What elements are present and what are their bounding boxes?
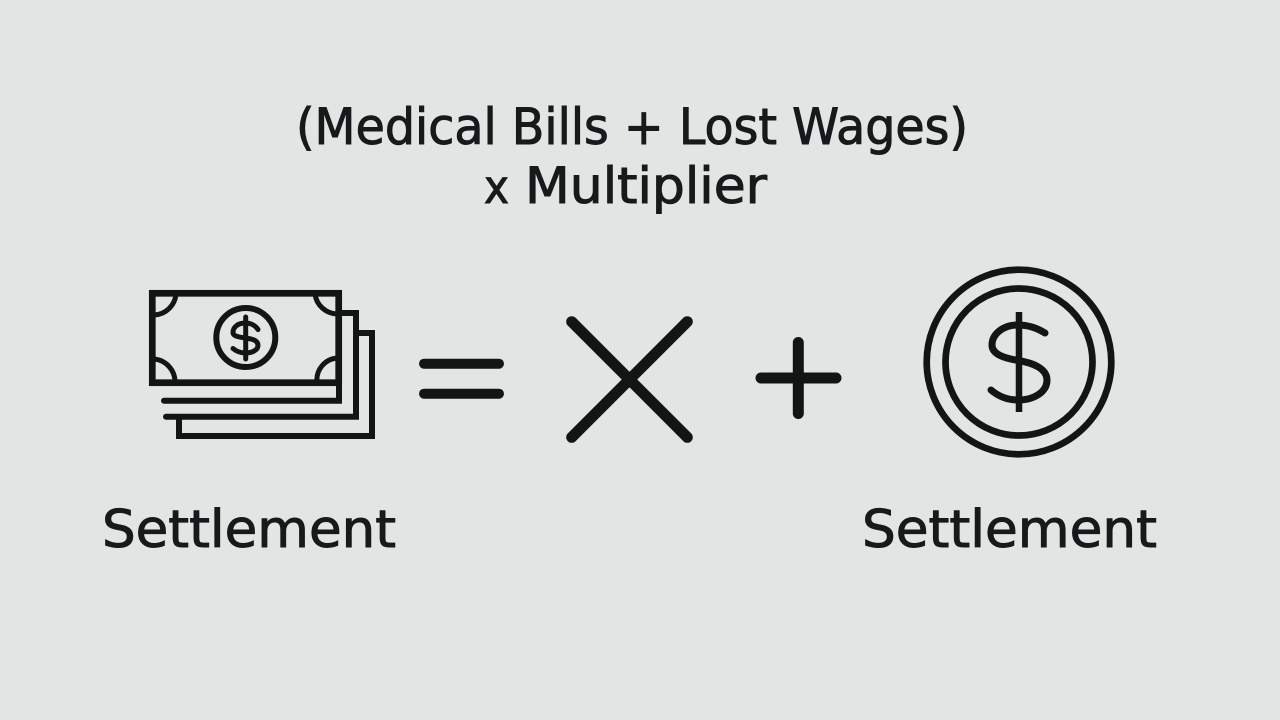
icon: dollar coin: [927, 270, 1111, 454]
label: settlement right: Settlement: [862, 500, 1157, 560]
icon: plus sign: [761, 342, 836, 414]
icon: equals sign: [424, 364, 499, 394]
icon: stack of banknotes: [152, 293, 372, 436]
title: settlement formula: Multiplier: [525, 157, 767, 215]
title: settlement formula: x: [484, 160, 509, 214]
icon: multiplication cross: [572, 322, 687, 437]
title: settlement formula: (Medical Bills + Lost Wages): [296, 98, 968, 156]
label: settlement left: Settlement: [102, 500, 396, 560]
title: settlement formula: [296, 98, 968, 215]
